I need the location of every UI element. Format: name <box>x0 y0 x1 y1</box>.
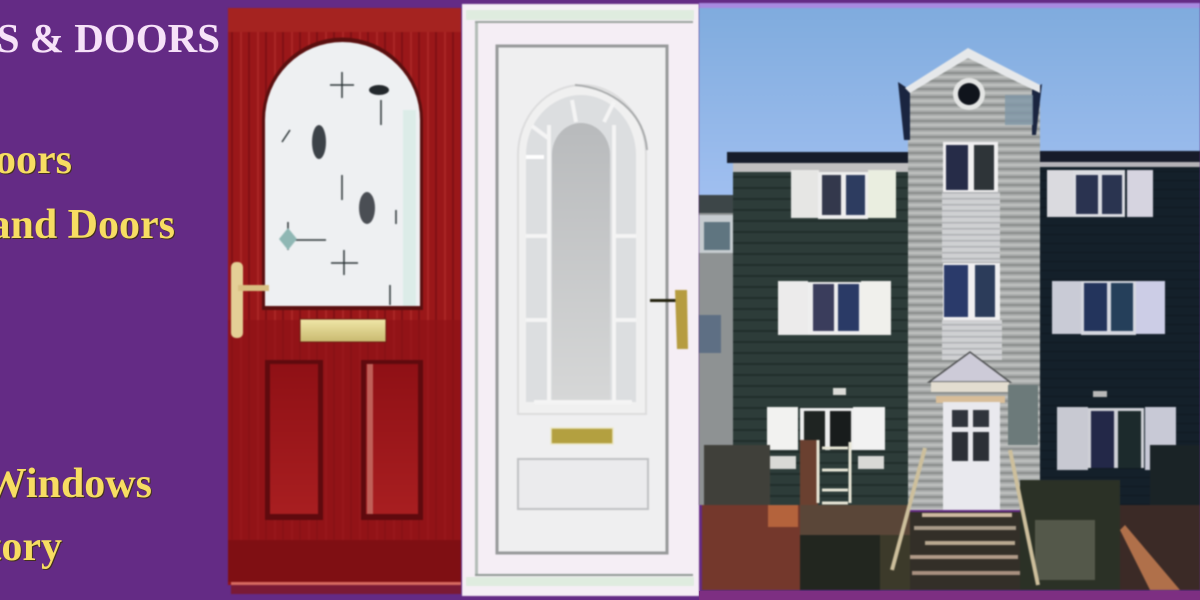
door handle <box>650 290 688 349</box>
arched glass panel <box>262 37 423 310</box>
door leaf panel <box>497 46 667 553</box>
lower row windows <box>764 407 1176 470</box>
lower panel <box>518 459 648 509</box>
door sill <box>228 540 461 594</box>
panel: building photo <box>699 3 1200 590</box>
panel: text column <box>0 15 220 570</box>
lower right panel <box>361 360 423 520</box>
panel: white upvc door <box>462 4 699 596</box>
door handle <box>231 262 269 338</box>
arched glazing <box>518 85 647 414</box>
stair railings <box>892 448 1038 585</box>
letterbox <box>300 319 386 342</box>
right dark wing <box>1037 151 1200 510</box>
letterbox <box>551 428 613 444</box>
upper row windows <box>791 170 1153 219</box>
leaded glass motifs <box>282 72 396 305</box>
side gate <box>818 440 850 503</box>
central frosted pane <box>552 123 610 402</box>
sky <box>699 7 1200 197</box>
door slab <box>228 8 461 585</box>
steps <box>910 512 1020 590</box>
far left building <box>699 195 735 505</box>
front door <box>943 402 1000 510</box>
middle row windows <box>778 281 1165 335</box>
outer frame <box>462 4 699 596</box>
panel: bottom strip <box>699 591 1200 600</box>
ground and walls <box>702 440 1200 590</box>
tower windows <box>943 142 1000 320</box>
wall lamps <box>833 388 1107 397</box>
lower left panel <box>265 360 323 520</box>
round window <box>953 78 985 110</box>
entrance porch <box>929 352 1038 510</box>
left dark wing <box>727 152 910 510</box>
tower gable trim <box>905 48 1040 93</box>
panel: red composite door <box>228 8 461 594</box>
central tower <box>898 48 1042 510</box>
